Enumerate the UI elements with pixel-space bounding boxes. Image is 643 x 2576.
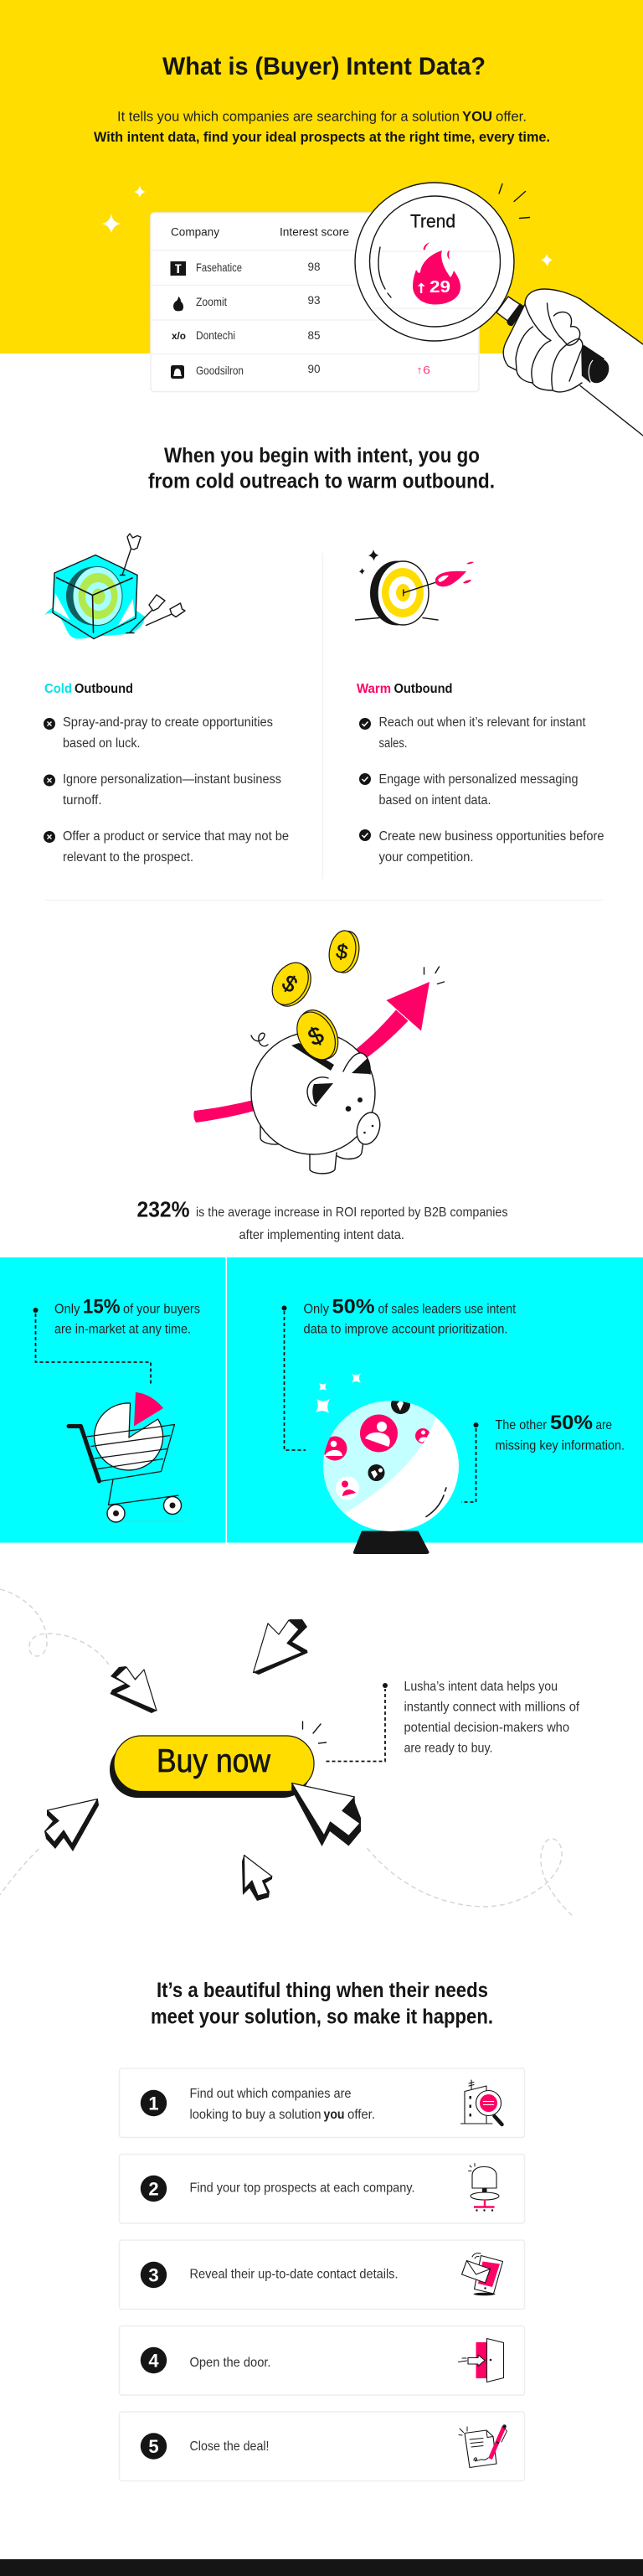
icon: flame with trend number: 29 [430,278,450,297]
step text: Find out which companies are [189,2087,352,2101]
step text: Open the door. [189,2356,271,2370]
panel: yellow hero background [0,0,643,354]
icon: shopping cart with pie chart [69,1392,186,1522]
heading: cold outbound [44,682,133,696]
row: Dontechi: x/o [172,330,186,342]
item: reach out: sales. [378,736,407,751]
table header: Company [171,226,219,238]
item: create: Create new business opportunities before [378,829,604,844]
item: engage: based on intent data. [378,793,491,808]
panel: cyan stats band [0,1257,643,1543]
panel: company interest table [151,213,479,392]
fallen arrow [126,595,165,633]
stat: 232 percent ROI: is the average increase in ROI reported by B2B companies [196,1205,507,1220]
stat: other 50 percent missing [496,1412,625,1453]
stat: other 50 percent missing: are [596,1418,612,1433]
icon: upper-left cursor [111,1666,157,1713]
stat: 50 percent use intent data: 50% [332,1295,375,1319]
subtitle: offer. [496,109,527,124]
heading: needs meet solution [151,1979,493,2029]
item: offer a product [44,829,289,865]
arrow in cube [121,534,141,575]
step number: 2 [148,2178,159,2200]
pig tail [251,1033,268,1046]
coin slot [291,1043,334,1071]
falling coin [326,928,363,975]
heading: cold to warm [148,444,495,493]
heading: cold outbound: Cold [44,682,72,696]
connector: other 50 percent to orb [461,1422,479,1502]
heading: cold outbound: Outbound [75,682,133,696]
black grip end [576,345,613,387]
hand [503,289,643,436]
pig legs [260,1120,363,1174]
stat: 50 percent use intent data: of sales leaders use intent [378,1302,516,1317]
contact avatar [360,1414,398,1453]
ball shine [426,1488,446,1516]
step number [141,2176,167,2202]
stat: 50 percent use intent data: Only [303,1302,329,1317]
pig near ear [307,1077,333,1106]
lens rays [499,184,529,218]
stat: other 50 percent missing: The other [496,1418,548,1433]
heading: cold to warm: When you begin with intent, you go [164,444,480,467]
heading: needs meet solution: It’s a beautiful thing when their needs [157,1979,488,2002]
row: Fasehatice [171,261,321,276]
step 3 card [119,2240,524,2309]
step number: 1 [148,2093,159,2114]
magnifier handle [496,297,521,323]
connector: 50 percent to orb [281,1305,306,1450]
icon: contract and pen [459,2424,507,2468]
item: ignore personalization [44,772,281,808]
step text: Reveal their up-to-date contact details. [189,2267,399,2282]
item: reach out [359,715,586,751]
row: Zoomit [173,294,321,311]
title: What is (Buyer) Intent Data? [162,53,486,80]
stat: 50 percent use intent data [303,1295,516,1337]
row: Fasehatice: 98 [307,261,321,273]
stat: 15 percent in-market: Only [54,1302,80,1317]
item: offer a product: Offer a product or service that may not be [63,829,289,844]
step text: you [323,2108,345,2122]
table header [171,226,349,238]
table header: Interest score [280,226,349,238]
row: Goodsilron: Goodsilron [196,364,244,377]
step number: 4 [148,2351,159,2371]
item: engage: Engage with personalized messaging [378,772,578,787]
icon: lower-left cursor [44,1799,99,1851]
magnifier lens [355,183,514,341]
item: ignore personalization: Ignore personalization—instant business [63,772,281,787]
pig far ear [343,1053,371,1074]
panel: cold outbound list [44,682,289,865]
illustration: piggy bank with rising arrow [193,928,445,1174]
arrow rays [424,967,444,983]
item: ignore personalization: turnoff. [63,793,102,808]
icon: open door with arrow [459,2339,504,2382]
ball white [323,1401,459,1531]
icon: office chair [469,2163,499,2212]
call to action: buy now button: Buy now [157,1743,271,1779]
step 2 card [119,2155,524,2223]
arm fill [525,289,643,436]
icon: frozen target cube [44,534,185,639]
step 5 card [119,2412,524,2481]
row: Zoomit: 93 [307,294,321,307]
icon: flame with trend number: ↑ [415,279,427,297]
ball sparkles [316,1373,361,1413]
column divider [322,553,323,879]
connector: 15 percent to cart [33,1308,151,1384]
heading: needs meet solution: meet your solution, so make it happen. [151,2006,493,2029]
item: create: your competition. [378,850,474,865]
panel: warm outbound list [357,682,604,865]
row: Dontechi: Dontechi [196,329,235,342]
heading: warm outbound: Outbound [394,682,452,696]
item: engage [359,772,578,808]
pie chart [95,1403,163,1470]
row: Dontechi [172,329,321,342]
falling coin [265,956,318,1013]
step number [141,2090,167,2116]
item: spray and pray: Spray-and-pray to create opportunities [63,715,273,730]
stat: 15 percent in-market: 15% [83,1295,121,1319]
step number [141,2262,167,2288]
caption: Lusha intent data: instantly connect with millions of [404,1701,580,1714]
ball stand [353,1531,430,1554]
caption: Lusha intent data: Lusha’s intent data helps you [404,1680,558,1694]
contact avatar [336,1476,359,1500]
icon: warm target with flaming arrow [355,550,474,625]
icon: top cursor [253,1619,308,1675]
stat: 15 percent in-market: of your buyers [123,1302,200,1317]
stat: 15 percent in-market: are in-market at any time. [54,1322,191,1337]
icon: bottom cursor [242,1855,272,1901]
coin in slot: $ [304,1022,328,1051]
step text [189,2087,375,2122]
call to action: buy now button [110,1736,314,1798]
stat: other 50 percent missing: missing key information. [496,1439,625,1453]
caption: Lusha intent data [404,1680,580,1756]
item: create [359,829,604,865]
stat: 232 percent ROI [137,1196,507,1242]
icon: flame with trend number [413,243,460,305]
falling coin: $ [278,970,301,998]
coin in slot [289,1004,346,1066]
dashed cursor trails [0,1589,574,1918]
connector: button to caption [327,1683,388,1761]
icon: building under magnifier [460,2080,502,2124]
icon: phone and envelope [462,2253,502,2295]
heading: warm outbound: Warm [357,682,391,696]
stat: 50 percent use intent data: data to improve account prioritization. [303,1322,507,1337]
ball known half [323,1401,435,1513]
subtitle: YOU [462,109,492,124]
subtitle: It tells you which companies are searching for a solution [117,109,460,124]
heading: cold to warm: from cold outreach to warm outbound. [148,469,495,493]
falling coin: $ [334,940,349,964]
item: offer a product: relevant to the prospect. [63,850,193,865]
heading: warm outbound [357,682,452,696]
stat: 232 percent ROI: after implementing intent data. [239,1228,404,1242]
icon: sparkles on yellow [101,185,553,266]
step number: 3 [148,2265,159,2285]
row: Fasehatice: Fasehatice [196,261,242,274]
stat: 232 percent ROI: 232% [137,1196,189,1221]
button rays [303,1722,327,1743]
row: Goodsilron: ↑6 [416,364,430,376]
step number [141,2347,167,2373]
pig body [251,1032,375,1154]
fallen arrow [146,603,185,625]
illustration: hand holding magnifying glass [355,183,643,436]
row: Goodsilron: 90 [307,363,321,375]
row: Goodsilron [171,363,430,379]
step text: Close the deal! [189,2439,270,2454]
stat: other 50 percent missing: 50% [550,1412,593,1434]
pie slice [134,1392,163,1426]
row: Zoomit: Zoomit [196,296,227,308]
subtitle: With intent data, find your ideal prospects at the right time, every time. [94,129,550,145]
cart [69,1424,186,1522]
caption: Lusha intent data: are ready to buy. [404,1741,492,1756]
pig snout [353,1109,383,1148]
trend label: Trend [410,211,455,231]
rising arrow [193,982,430,1123]
item: spray and pray [44,715,273,751]
caption: Lusha intent data: potential decision-makers who [404,1721,569,1735]
item: spray and pray: based on luck. [63,736,141,751]
step 4 card [119,2326,524,2395]
stat: 15 percent in-market [54,1295,200,1337]
step text: looking to buy a solution [189,2108,322,2122]
step text: offer. [347,2108,375,2122]
step number: 5 [148,2436,159,2457]
section divider [45,900,603,901]
step 1 card [119,2068,524,2138]
step text: Find your top prospects at each company. [189,2181,415,2195]
icon: large cursor [291,1783,361,1846]
pig eyes [346,1106,351,1112]
subtitle [94,109,550,145]
item: reach out: Reach out when it’s relevant for instant [378,715,586,730]
step number [141,2433,167,2460]
footer bar [0,2559,643,2576]
illustration: crystal ball [316,1373,459,1554]
row: Dontechi: 85 [307,329,321,342]
